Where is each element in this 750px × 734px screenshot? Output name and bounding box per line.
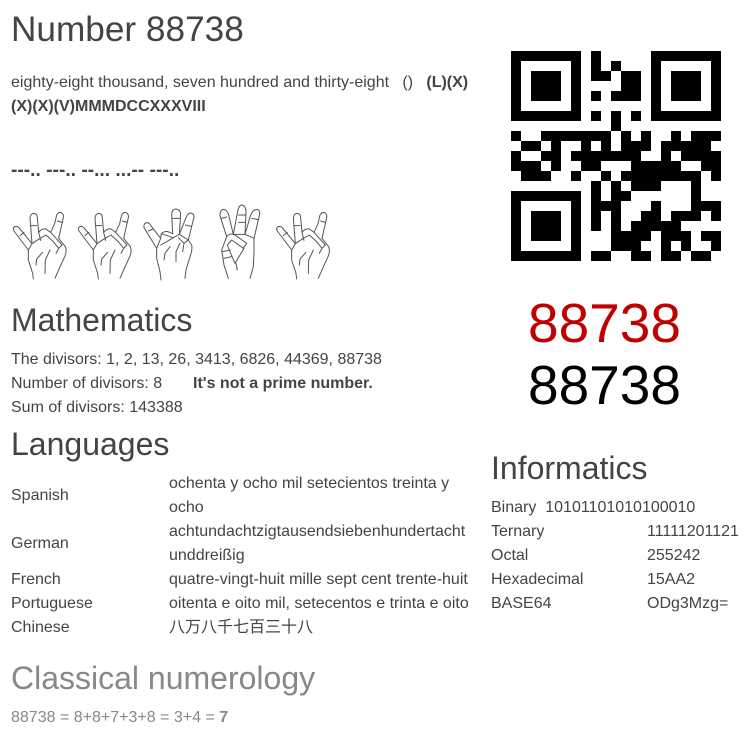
languages table: Chinese <box>11 619 70 636</box>
heading: languages: Languages <box>11 426 169 462</box>
hand 5 <box>277 212 329 279</box>
hand 3 <box>144 209 194 280</box>
title: Number 88738 <box>11 10 244 49</box>
languages table: German <box>11 535 69 552</box>
number in words and roman numeral: eighty-eight thousand, seven hundred and thirty-eight () (L)(X) <box>11 74 468 91</box>
languages table: ochenta y ocho mil setecientos treinta y <box>169 475 449 492</box>
informatics table: Binary 10101101010100010 <box>491 499 695 516</box>
morse code: ---.. ---.. --... ...-- ---.. <box>11 160 179 181</box>
languages table: ocho <box>169 499 204 516</box>
languages table: oitenta e oito mil, setecentos e trinta e oito <box>169 595 469 612</box>
numerology sum: 88738 = 8+8+7+3+8 = 3+4 = 7 <box>11 709 228 726</box>
heading: classical numerology: Classical numerology <box>11 660 315 696</box>
languages table: Portuguese <box>11 595 93 612</box>
big number red: 88738 <box>528 292 681 354</box>
sign language hands <box>12 204 330 280</box>
divisors block: The divisors: 1, 2, 13, 26, 3413, 6826, 44369, 88738 <box>11 351 382 368</box>
divisors block: Number of divisors: 8 <box>11 375 162 392</box>
languages table <box>11 475 469 636</box>
big number black: 88738 <box>528 354 681 416</box>
informatics table: Octal <box>491 547 528 564</box>
informatics table <box>491 499 739 612</box>
hand 4 <box>220 205 260 278</box>
languages table: Spanish <box>11 487 69 504</box>
informatics table: 255242 <box>647 547 700 564</box>
divisors block <box>11 351 382 416</box>
heading: informatics: Informatics <box>491 450 647 486</box>
divisors block: It's not a prime number. <box>193 375 373 392</box>
informatics table: 11111201121 <box>647 523 739 540</box>
number in words and roman numeral <box>11 74 468 115</box>
informatics table: BASE64 <box>491 595 551 612</box>
informatics table: Hexadecimal <box>491 571 583 588</box>
languages table: 八万八千七百三十八 <box>169 619 313 636</box>
hand 1 <box>13 212 66 279</box>
informatics table: 15AA2 <box>647 571 695 588</box>
informatics table: ODg3Mzg= <box>647 595 728 612</box>
languages table: quatre-vingt-huit mille sept cent trente-huit <box>169 571 468 588</box>
languages table: achtundachtzigtausendsiebenhundertacht <box>169 523 465 540</box>
divisors block: Sum of divisors: 143388 <box>11 399 183 416</box>
number in words and roman numeral: (X)(X)(V)MMMDCCXXXVIII <box>11 98 206 115</box>
languages table: unddreißig <box>169 547 245 564</box>
qr code <box>511 51 721 261</box>
languages table: French <box>11 571 61 588</box>
heading: mathematics: Mathematics <box>11 302 192 338</box>
hand 2 <box>78 212 131 279</box>
informatics table: Ternary <box>491 523 544 540</box>
